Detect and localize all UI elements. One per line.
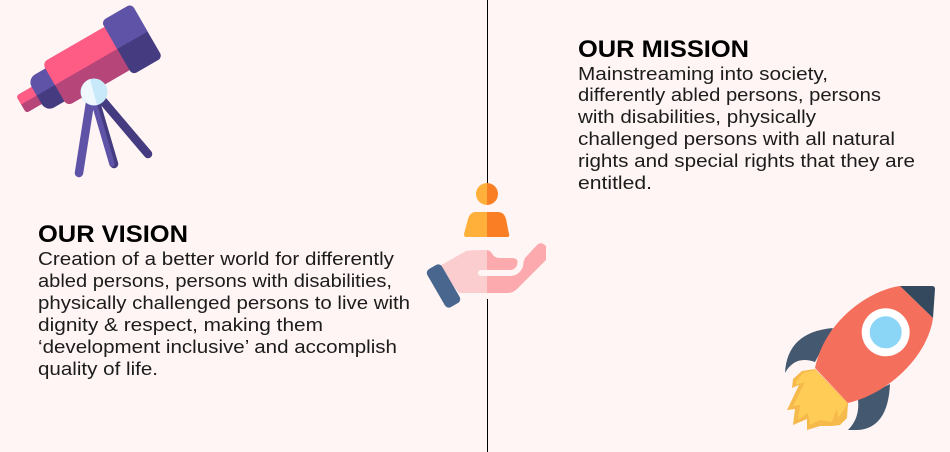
text block: mission: challenged persons with all natural	[578, 128, 895, 149]
text block: vision: ‘development inclusive’ and accomplish	[38, 336, 397, 357]
icon: rocket	[785, 286, 935, 430]
text block: vision: Creation of a better world for differently	[38, 248, 395, 269]
text block: mission: differently abled persons, persons	[578, 84, 881, 105]
text block: vision: dignity & respect, making them	[38, 314, 323, 335]
heading: our mission: OUR MISSION	[578, 36, 749, 63]
text block: vision: physically challenged persons to live with	[38, 292, 410, 313]
text block: vision: abled persons, persons with disabilities,	[38, 270, 392, 291]
text block: mission: with disabilities, physically	[577, 106, 817, 127]
text block: mission: rights and special rights that they are	[578, 150, 915, 171]
icon: person on open hand	[425, 183, 546, 309]
heading: our vision: OUR VISION	[38, 221, 188, 248]
text block: vision	[38, 248, 410, 379]
text block: mission	[577, 63, 915, 193]
icon: telescope	[5, 4, 163, 173]
text block: mission: entitled.	[578, 172, 652, 193]
center divider line	[487, 0, 488, 452]
text block: mission: Mainstreaming into society,	[578, 63, 828, 84]
text block: vision: quality of life.	[38, 358, 158, 379]
